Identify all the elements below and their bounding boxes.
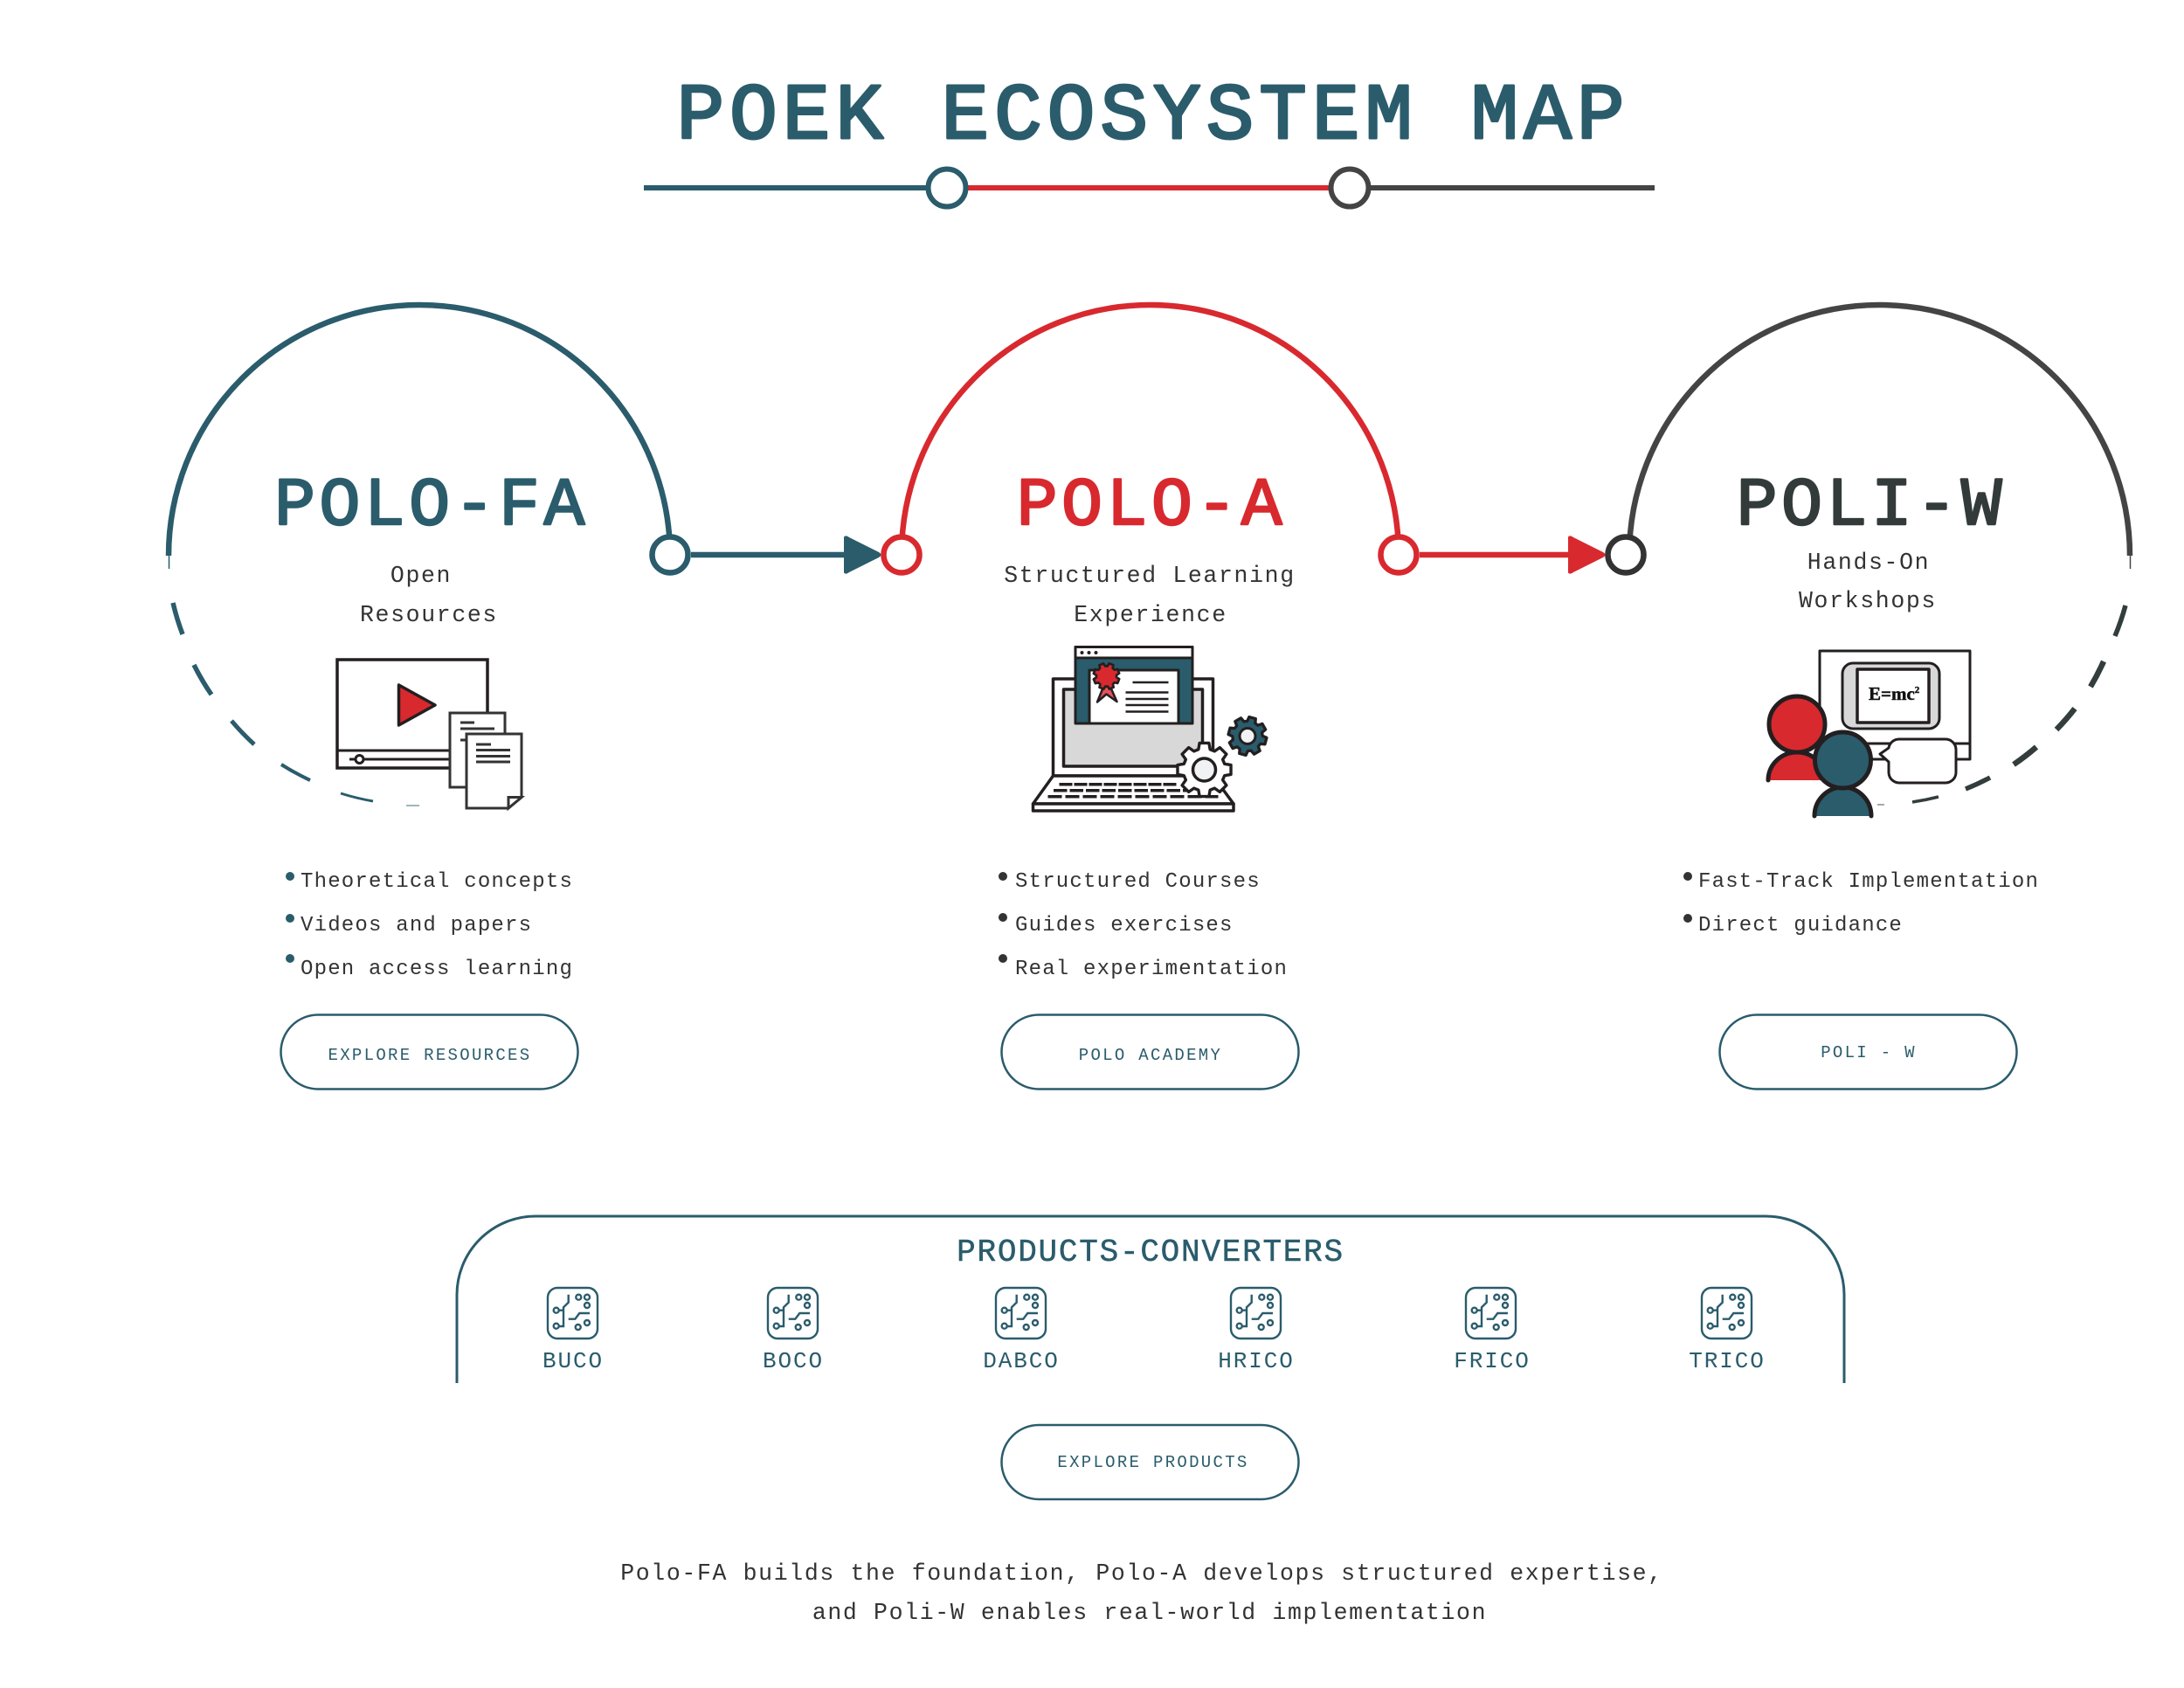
- button: explore resources: [281, 1015, 578, 1089]
- description: POLI-W: Workshops: [1799, 588, 1937, 614]
- bullet list: POLO-FA: Videos and papers: [301, 914, 532, 937]
- arc: POLO-A: [902, 305, 1399, 555]
- arrow: POLO-A to POLI-W: [1420, 536, 1606, 574]
- node: POLO-FA output: [652, 536, 688, 573]
- product: BUCO: [543, 1288, 604, 1374]
- bullet list: POLO-A: Guides exercises: [1015, 914, 1234, 937]
- description: POLO-A: Experience: [1074, 602, 1227, 628]
- product: BOCO: [763, 1288, 824, 1374]
- arc: POLI-W: [1629, 305, 2130, 805]
- product: FRICO: FRICO: [1454, 1348, 1531, 1374]
- closing statement: [620, 1560, 1663, 1626]
- panel: products-converters: [457, 1216, 1844, 1383]
- product: DABCO: DABCO: [983, 1348, 1060, 1374]
- closing statement: and Poli-W enables real-world implementation: [812, 1600, 1487, 1626]
- button: explore products: EXPLORE PRODUCTS: [1057, 1453, 1249, 1472]
- heading: POLO-FA: POLO-FA: [274, 468, 589, 545]
- node: POLO-A input: [884, 536, 919, 573]
- product: TRICO: [1689, 1288, 1766, 1374]
- bullet list: POLO-FA: Theoretical concepts: [301, 870, 573, 894]
- arrow: POLO-FA to POLO-A: [691, 536, 881, 574]
- button: explore products: [1001, 1425, 1298, 1499]
- bullet list: POLO-A: Real experimentation: [1015, 958, 1288, 981]
- heading: products-converters: PRODUCTS-CONVERTERS: [957, 1235, 1344, 1270]
- icon: people at whiteboard: E=mc: [1869, 683, 1915, 704]
- bullet list: POLO-FA: [286, 870, 573, 981]
- product: HRICO: HRICO: [1218, 1348, 1295, 1374]
- panel outline: [457, 1216, 1844, 1383]
- node: POLO-A output: [1380, 536, 1417, 573]
- icon: video and documents: [337, 660, 522, 808]
- button: polo academy: [1001, 1015, 1298, 1089]
- bullet list: POLO-A: Structured Courses: [1015, 870, 1261, 894]
- icon: people at whiteboard: 2: [1915, 685, 1920, 695]
- bullet list: POLI-W: [1683, 870, 2039, 937]
- product: BUCO: BUCO: [543, 1348, 604, 1374]
- product: TRICO: TRICO: [1689, 1348, 1766, 1374]
- product: BOCO: BOCO: [763, 1348, 824, 1374]
- title: POEK ECOSYSTEM MAP: [677, 73, 1629, 163]
- description: POLO-FA: Resources: [360, 602, 498, 628]
- button: polo academy: POLO ACADEMY: [1079, 1046, 1222, 1065]
- description: POLO-A: [1004, 563, 1296, 628]
- heading: POLI-W: POLI-W: [1737, 468, 2006, 545]
- icon: people at whiteboard: [1768, 651, 1970, 816]
- icon: laptop with certificate and gears: [1033, 647, 1271, 811]
- description: POLI-W: [1799, 550, 1937, 614]
- closing statement: Polo-FA builds the foundation, Polo-A develops structured expertise,: [620, 1560, 1663, 1587]
- description: POLO-FA: [360, 563, 498, 628]
- heading: POLO-A: POLO-A: [1017, 468, 1286, 545]
- description: POLO-FA: Open: [390, 563, 452, 589]
- title divider with nodes: [644, 169, 1655, 206]
- bullet list: POLO-A: [999, 870, 1288, 981]
- panel: POLO-A: [902, 305, 1399, 1089]
- bullet list: POLI-W: Direct guidance: [1698, 914, 1903, 937]
- panel: POLO-FA: [169, 305, 670, 1089]
- description: POLI-W: Hands-On: [1807, 550, 1930, 576]
- bullet list: POLO-FA: Open access learning: [301, 958, 573, 981]
- description: POLO-A: Structured Learning: [1004, 563, 1296, 589]
- product: DABCO: [983, 1288, 1060, 1374]
- button: poli-w: [1719, 1015, 2016, 1089]
- arc: POLO-FA: [169, 305, 670, 806]
- button: poli-w: POLI - W: [1821, 1043, 1917, 1062]
- button: explore resources: EXPLORE RESOURCES: [328, 1046, 531, 1065]
- node: POLI-W input: [1607, 536, 1644, 573]
- panel: POLI-W: [1629, 305, 2130, 1090]
- bullet list: POLI-W: Fast-Track Implementation: [1698, 870, 2039, 894]
- product: FRICO: [1454, 1288, 1531, 1374]
- product: HRICO: [1218, 1288, 1295, 1374]
